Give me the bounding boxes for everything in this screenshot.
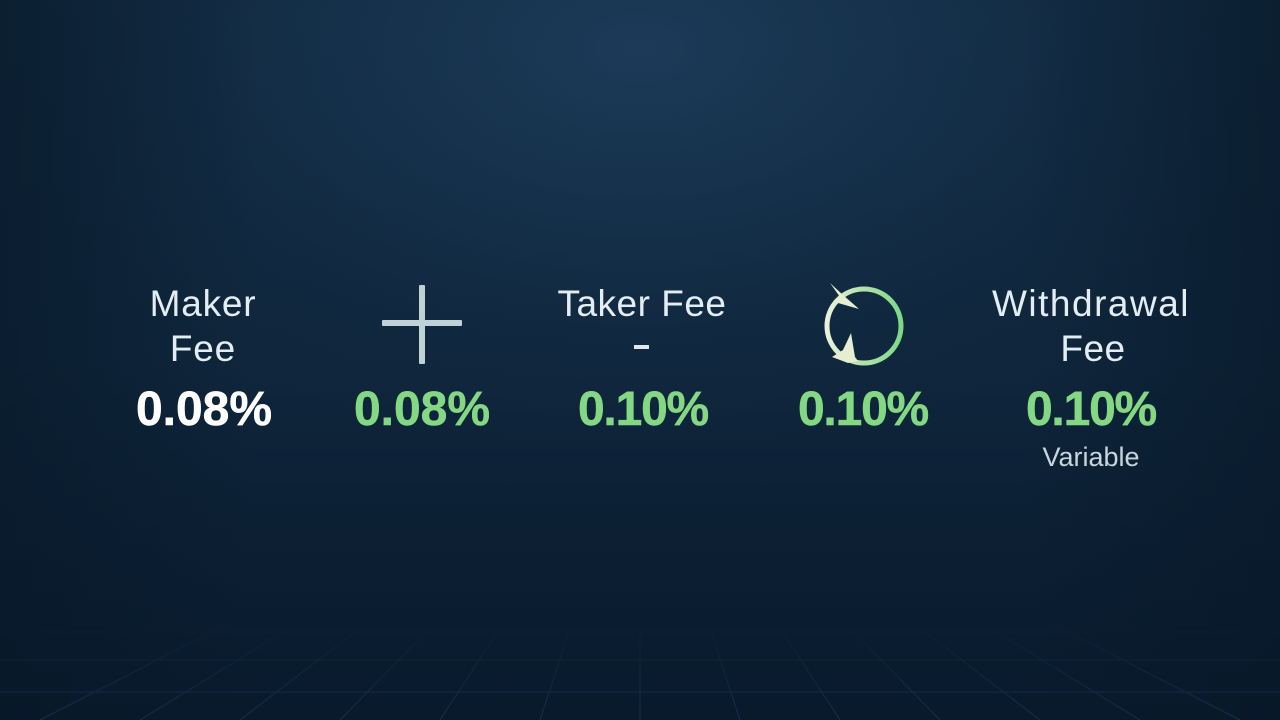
maker fee value: 0.08%	[136, 383, 272, 436]
column: maker fee	[136, 283, 272, 436]
combined value: 0.08%: 0.08%	[354, 383, 490, 436]
floor grid	[0, 643, 1280, 720]
column: withdrawal fee	[992, 283, 1190, 472]
minus sign	[634, 345, 649, 349]
withdrawal fee second line: Fee	[1060, 328, 1126, 369]
maker fee label: Fee	[170, 328, 236, 369]
taker fee label: Taker Fee	[557, 283, 727, 324]
withdrawal fee label: Withdrawal	[992, 283, 1190, 324]
taker fee value: 0.10%	[578, 383, 709, 436]
withdrawal fee value: 0.10%	[1026, 383, 1157, 436]
combined value: 0.10%: 0.10%	[798, 383, 929, 436]
maker fee label: Maker	[150, 283, 256, 324]
variable note: Variable	[1042, 442, 1140, 472]
icon: circular arrows	[827, 283, 901, 363]
column: taker fee	[557, 283, 727, 436]
icon: plus sign	[382, 285, 462, 364]
